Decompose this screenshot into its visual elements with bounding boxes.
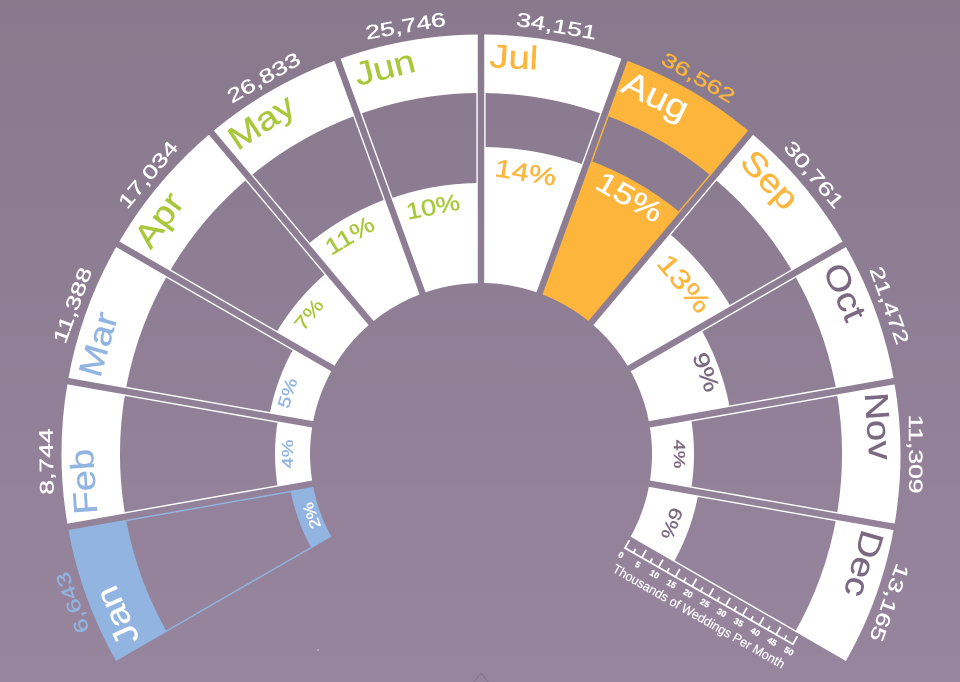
July percentage band <box>481 211 563 229</box>
October percentage band <box>665 347 693 417</box>
October month band <box>819 257 871 386</box>
August percentage band <box>564 223 638 269</box>
October label: Oct <box>816 258 874 327</box>
July label: Jul <box>489 38 539 77</box>
March percentage band <box>288 357 314 420</box>
June percentage band <box>405 230 481 246</box>
April side lines <box>218 222 288 304</box>
February percentage band <box>293 421 295 487</box>
March label: Mar <box>71 308 125 381</box>
scale axis: thousands of weddings per month <box>608 539 802 673</box>
September side lines <box>690 201 767 291</box>
March percent: 5% <box>275 376 302 411</box>
January count: 6,643 <box>52 569 94 636</box>
January percent: 2% <box>299 500 324 531</box>
month wedge: July <box>455 3 625 234</box>
November side lines <box>764 404 768 504</box>
January label: Jan <box>88 580 147 651</box>
March count: 11,388 <box>49 264 96 346</box>
January side lines <box>204 502 241 594</box>
August count: 36,562 <box>658 48 739 107</box>
July count: 34,151 <box>515 8 598 44</box>
March side lines <box>193 309 232 404</box>
September percent: 13% <box>651 248 717 319</box>
month wedge: March <box>54 247 332 422</box>
November percent: 4% <box>670 440 688 468</box>
January percentage band <box>299 486 323 546</box>
April percentage band <box>302 295 350 352</box>
September label: Sep <box>733 143 806 217</box>
November label: Nov <box>857 391 899 461</box>
axis tick labels: 45 <box>766 635 779 648</box>
June month band <box>346 58 481 87</box>
December count: 13,165 <box>865 561 914 645</box>
September percentage band <box>629 275 683 339</box>
November percentage band <box>670 421 673 487</box>
December side lines <box>733 505 772 601</box>
September count: 30,761 <box>780 137 848 213</box>
August month band <box>614 82 735 155</box>
June label: Jun <box>351 42 419 93</box>
March month band <box>91 257 143 386</box>
December month band <box>819 522 871 651</box>
June count: 25,746 <box>364 8 447 44</box>
August label: Aug <box>616 63 695 128</box>
June side lines <box>372 133 481 157</box>
month wedge: September <box>611 116 866 360</box>
month wedge: August <box>541 34 762 282</box>
May label: May <box>221 87 302 157</box>
April label: Apr <box>127 185 191 255</box>
April percent: 7% <box>290 295 328 335</box>
November month band <box>865 386 871 522</box>
August side lines <box>596 133 700 196</box>
axis tick labels: 30 <box>715 606 729 619</box>
May count: 26,833 <box>223 48 304 107</box>
axis tick labels: 35 <box>732 616 745 629</box>
February percent: 4% <box>279 440 297 468</box>
January month band <box>91 522 143 651</box>
June percent: 10% <box>404 190 462 225</box>
December percentage band <box>651 488 677 553</box>
axis tick labels: 5 <box>633 559 643 570</box>
axis tick labels: 50 <box>782 644 796 658</box>
May side lines <box>275 152 373 212</box>
December label: Dec <box>837 526 891 601</box>
August percent: 15% <box>590 164 669 229</box>
October count: 21,472 <box>865 263 914 347</box>
axis tick labels: 20 <box>682 587 695 600</box>
axis tick labels: 10 <box>648 567 661 581</box>
axis title: Thousands of Weddings Per Month <box>610 561 788 671</box>
month wedge: February <box>35 386 297 522</box>
month wedge: December <box>639 456 923 670</box>
May percent: 11% <box>321 212 379 261</box>
September month band <box>732 151 824 259</box>
axis tick labels: 25 <box>698 596 712 610</box>
month wedge: October <box>630 247 908 422</box>
month wedge: May <box>200 34 431 299</box>
July month band <box>481 58 616 87</box>
axis tick labels: 15 <box>665 577 678 591</box>
October side lines <box>747 299 788 401</box>
December percent: 6% <box>656 505 686 542</box>
February count: 8,744 <box>35 428 58 495</box>
October percent: 9% <box>687 349 724 395</box>
April month band <box>138 151 230 259</box>
axis tick labels: 40 <box>749 625 762 639</box>
axis line and ticks <box>624 540 798 645</box>
February month band <box>91 386 97 522</box>
month wedge: June <box>340 12 478 292</box>
month wedge: November <box>670 386 927 522</box>
May month band <box>227 82 348 155</box>
month wedge: January <box>56 486 332 661</box>
February label: Feb <box>63 448 105 516</box>
February side lines <box>197 405 202 503</box>
month wedge: April <box>120 134 369 366</box>
July percent: 14% <box>493 154 558 191</box>
April count: 17,034 <box>114 136 182 213</box>
May percentage band <box>337 243 405 284</box>
axis tick labels: 0 <box>616 549 626 561</box>
axis tick labels <box>616 549 796 658</box>
November count: 11,309 <box>905 414 927 494</box>
July side lines <box>481 115 596 140</box>
